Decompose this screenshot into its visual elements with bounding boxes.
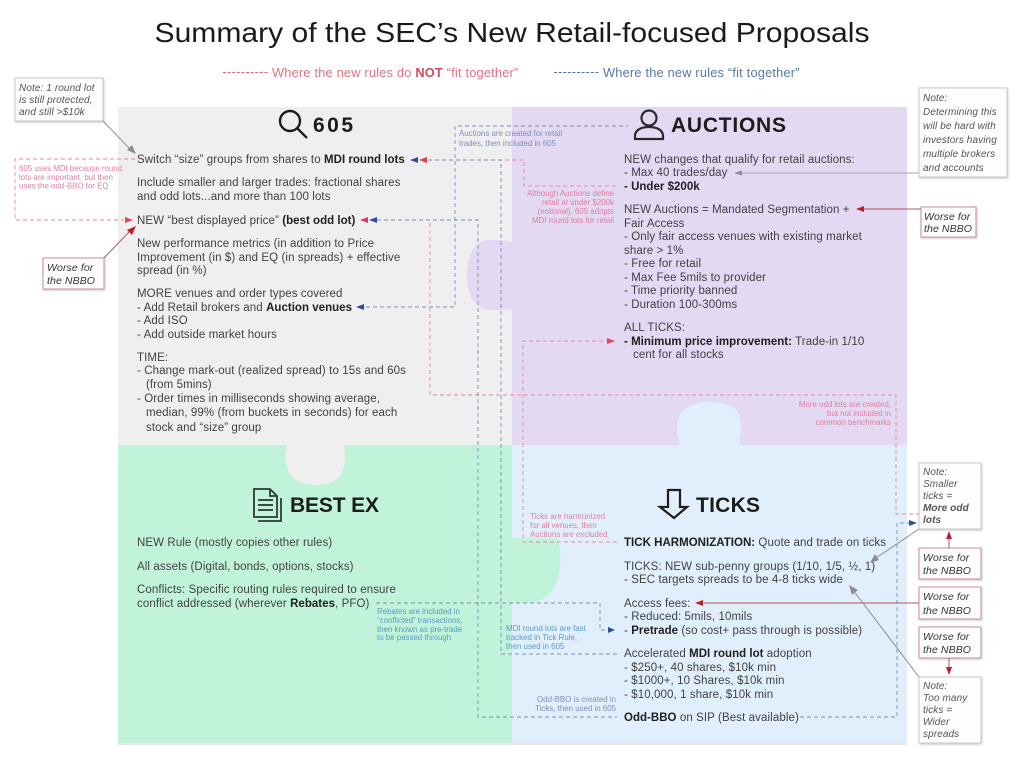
body: ticks: - $250+, 40 shares, $10k min — [624, 662, 776, 674]
annotation: rebates: “conflicted” transactions, — [377, 616, 463, 625]
body: auctions: NEW changes that qualify for retail auctions: — [624, 154, 855, 166]
body: auctions: - Free for retail — [624, 258, 701, 270]
arrowhead: minimum price improvement red — [607, 338, 615, 344]
body: 605: MORE venues and order types covered — [137, 288, 342, 300]
arrowhead: NEW best displayed price red — [125, 217, 133, 223]
annotation: more odd lots: but not included in — [827, 409, 891, 418]
legend: do not fit together: Where the new rules do NOT “fit together” — [272, 65, 518, 80]
callout: note 1 round lot: and still >$10k — [19, 107, 86, 118]
callout: note smaller ticks: lots — [923, 515, 942, 526]
body: auctions: ALL TICKS: — [624, 322, 685, 334]
annotation: rebates: Rebates are included in — [377, 607, 460, 616]
annotation: auctions created: Auctions are created for retail — [459, 129, 562, 138]
body: 605: NEW “best displayed price” (best odd lot) — [137, 215, 355, 227]
panel text: 605 — [137, 111, 409, 434]
panel text: ticks — [624, 490, 889, 724]
arrow: worse to access fees — [695, 600, 919, 606]
arrowhead: best odd lot blue — [369, 217, 377, 223]
annotation: more odd lots: common benchmarks — [816, 418, 891, 427]
callout: note too many ticks: Note: — [923, 681, 948, 692]
callout: worse for NBBO auctions — [921, 207, 976, 237]
callout: note smaller ticks: ticks = — [923, 491, 952, 502]
body: ticks: TICK HARMONIZATION: Quote and trade on ticks — [624, 537, 886, 549]
body: auctions: - Duration 100-300ms — [624, 299, 737, 311]
annotation: rebates: then known as pre-trade — [377, 625, 463, 634]
body: ticks: - $1000+, 10 Shares, $10k min — [624, 675, 784, 687]
heading: ticks: TICKS — [696, 494, 760, 517]
blue connector: odd-BBO to best odd lot — [377, 220, 617, 717]
heading: 605: 605 — [313, 114, 353, 137]
annotation: ticks harmonized: Auctions are excluded — [530, 530, 608, 539]
panel: ticks — [512, 445, 907, 743]
callout: note determining — [919, 88, 1007, 177]
body: ticks: - Pretrade (so cost+ pass through is possible) — [624, 625, 862, 637]
callout: note too many ticks: Too many — [923, 693, 968, 704]
callout: worse for NBBO 3: Worse for — [923, 631, 970, 643]
body: 605: Include smaller and larger trades: fractional shares — [137, 177, 401, 189]
callout: note 1 round lot — [15, 78, 103, 121]
callout: note determining: Note: — [923, 93, 948, 104]
annotation: although auctions: (notional), 605 adopts — [538, 207, 614, 216]
callout: worse for NBBO 1 — [919, 548, 981, 579]
panel shadow — [118, 743, 907, 745]
icon: down arrow — [660, 490, 687, 518]
blue connector: odd-BBO to smaller ticks — [800, 523, 909, 717]
callout: worse for NBBO 3 — [919, 627, 981, 658]
arrow: note to max trades — [734, 170, 919, 176]
red connector: tick harmonization to min price improvement — [523, 341, 617, 542]
annotation: odd-BBO created: Ticks, then used in 605 — [535, 704, 617, 713]
body: 605: - Add Retail brokers and Auction venues — [137, 302, 352, 314]
body: auctions: share > 1% — [624, 245, 684, 257]
body: 605: Improvement (in $) and EQ (in spreads) + effective — [137, 252, 400, 264]
body: 605: spread (in %) — [137, 265, 207, 277]
arrow: too many ticks to spreads — [849, 585, 919, 677]
body: auctions: cent for all stocks — [633, 349, 724, 361]
puzzle knob: ticks into auctions — [677, 402, 741, 445]
icon: documents — [254, 489, 281, 521]
body: auctions: Fair Access — [624, 218, 685, 230]
body: 605: - Change mark-out (realized spread) to 15s and 60s — [137, 365, 406, 377]
body: ticks: - Reduced: 5mils, 10mils — [624, 611, 752, 623]
callout: note too many ticks: Wider — [923, 717, 950, 728]
body: auctions: - Max Fee 5mils to provider — [624, 272, 766, 284]
annotation: although auctions: MDI round lots for retail — [532, 216, 614, 225]
arrowhead: MDI round lots red — [419, 157, 427, 163]
panel text: best ex — [137, 489, 399, 610]
body: auctions: - Minimum price improvement: Trade-in 1/10 — [624, 336, 864, 348]
body: 605: (from 5mins) — [146, 379, 212, 391]
red connector: round lots to auctions — [428, 160, 617, 186]
callout: note determining: will be hard with — [923, 121, 996, 132]
heading: best ex: BEST EX — [290, 494, 379, 517]
body: 605: - Add ISO — [137, 315, 188, 327]
callout: note determining: and accounts — [923, 163, 984, 174]
arrowhead: auction venues blue — [356, 304, 364, 310]
annotation: MDI fast tracked: then used in 605 — [506, 642, 565, 651]
arrowhead: best odd lot red — [360, 217, 368, 223]
callout: worse for NBBO left — [43, 258, 104, 289]
arrow: worse to mandated segmentation — [856, 206, 921, 212]
callout: note too many ticks: ticks = — [923, 705, 952, 716]
callout: worse for NBBO left: the NBBO — [47, 275, 95, 287]
body: 605: - Order times in milliseconds showing average, — [137, 393, 380, 405]
callout: worse for NBBO 2: the NBBO — [923, 605, 971, 617]
annotation: auctions created: trades, then included in 605 — [459, 139, 557, 148]
body: ticks: - $10,000, 1 share, $10k min — [624, 689, 773, 701]
panel: best ex — [118, 445, 512, 743]
body: ticks: Access fees: — [624, 598, 690, 610]
body: 605: median, 99% (from buckets in seconds) for each — [146, 407, 397, 419]
callout: worse for NBBO auctions: the NBBO — [924, 223, 972, 235]
panel: 605 — [118, 107, 512, 445]
body: best ex: conflict addressed (wherever Rebates, PFO) — [137, 598, 369, 610]
arrow: smaller ticks to sub-penny — [870, 529, 919, 563]
body: ticks: - SEC targets spreads to be 4-8 ticks wide — [624, 574, 843, 586]
body: ticks: Odd-BBO on SIP (Best available) — [624, 712, 799, 724]
puzzle knob: best ex into ticks — [512, 538, 561, 603]
panel: auctions — [512, 107, 907, 445]
callout: worse for NBBO auctions: Worse for — [924, 211, 971, 223]
body: auctions: NEW Auctions = Mandated Segmentation + — [624, 204, 850, 216]
blue connector: MDI round lot — [428, 160, 617, 654]
arrow: worse up to note — [946, 531, 952, 548]
heading: auctions: AUCTIONS — [671, 114, 786, 137]
body: auctions: - Only fair access venues with existing market — [624, 231, 863, 243]
callout: note too many ticks — [919, 677, 981, 743]
callout: worse for NBBO left: Worse for — [47, 262, 94, 274]
connector arrowheads — [125, 157, 917, 633]
legend — [223, 65, 800, 80]
annotation: 605 uses MDI: uses the odd-BBO for EQ — [19, 182, 108, 190]
annotation: although auctions: Although Auctions define — [527, 189, 615, 198]
annotation: rebates: to be passed through — [377, 633, 451, 642]
annotation: ticks harmonized: for all venues, then — [530, 521, 597, 530]
red connector: 605 note loop — [15, 159, 135, 220]
callout: note 1 round lot: is still protected, — [19, 95, 93, 106]
body: auctions: - Time priority banned — [624, 285, 737, 297]
blue connector: rebates — [376, 603, 607, 630]
puzzle knob: auctions into 605 — [467, 240, 512, 310]
annotation: although auctions: retail at under $200k — [542, 198, 614, 207]
annotation: odd-BBO created: Odd-BBO is created in — [537, 695, 616, 704]
callout: note determining: multiple brokers — [923, 149, 995, 160]
callout: note smaller ticks: Note: — [923, 467, 948, 478]
callout: worse for NBBO 2 — [919, 587, 981, 619]
arrow: worse down to note — [946, 658, 952, 675]
arrow: note to size groups — [103, 121, 136, 154]
arrowhead: smaller ticks blue — [909, 520, 917, 526]
annotation: MDI fast tracked: tracked in Tick Rule, — [506, 633, 577, 642]
callout: note determining: investors having — [923, 135, 997, 146]
body: ticks: Accelerated MDI round lot adoption — [624, 648, 812, 660]
body: 605: TIME: — [137, 352, 168, 364]
body: best ex: NEW Rule (mostly copies other rules) — [137, 537, 332, 549]
body: ticks: TICKS: NEW sub-penny groups (1/10, 1/5, ½, 1) — [624, 561, 875, 573]
callout: worse for NBBO 1: the NBBO — [923, 565, 971, 577]
body: 605: and odd lots...and more than 100 lots — [137, 191, 331, 203]
callout: note smaller ticks: Smaller — [923, 479, 958, 490]
body: auctions: - Under $200k — [624, 181, 700, 193]
panel text: auctions — [624, 110, 868, 361]
legend: fit together: Where the new rules “fit together” — [603, 65, 800, 80]
body: auctions: - Max 40 trades/day — [624, 167, 728, 179]
panel: puzzle background — [118, 107, 907, 745]
annotation: more odd lots: More odd lots are created, — [799, 400, 891, 409]
callout: note smaller ticks: More odd — [923, 503, 970, 514]
callout: worse for NBBO 1: Worse for — [923, 552, 970, 564]
body: 605: Switch “size” groups from shares to MDI round lots — [137, 154, 405, 166]
annotation: MDI fast tracked: MDI round lots are fast — [506, 624, 587, 633]
callout: note too many ticks: spreads — [923, 729, 959, 740]
arrowhead: MDI round lots blue — [410, 157, 418, 163]
title: Summary of the SEC’s New Retail-focused Proposals — [154, 17, 870, 48]
body: 605: New performance metrics (in addition to Price — [137, 238, 374, 250]
body: 605: stock and “size” group — [146, 422, 261, 434]
body: best ex: All assets (Digital, bonds, options, stocks) — [137, 561, 354, 573]
annotation: ticks harmonized: Ticks are harmonized — [530, 512, 605, 521]
body: 605: - Add outside market hours — [137, 329, 277, 341]
callout: worse for NBBO 3: the NBBO — [923, 644, 971, 656]
arrowhead: pretrade blue — [608, 627, 615, 633]
callout: note 1 round lot: Note: 1 round lot — [19, 83, 96, 94]
body: best ex: Conflicts: Specific routing rules required to ensure — [137, 584, 396, 596]
callout: worse for NBBO 2: Worse for — [923, 591, 970, 603]
icon: person — [635, 110, 663, 139]
blue connector: auction venues — [366, 126, 628, 307]
callout: note smaller ticks — [919, 463, 981, 529]
callout: note determining: Determining this — [923, 107, 997, 118]
connector lines: fit and not fit — [15, 126, 920, 717]
icon: magnifier — [280, 111, 307, 138]
arrow: worse to best displayed price — [104, 226, 136, 258]
annotation: 605 uses MDI: lots are important, but then — [19, 173, 113, 182]
red connector: best odd lot to smaller ticks note — [377, 220, 920, 514]
annotation: 605 uses MDI: 605 uses MDI because round — [19, 164, 122, 173]
puzzle knob: 605 into best ex — [286, 445, 345, 485]
